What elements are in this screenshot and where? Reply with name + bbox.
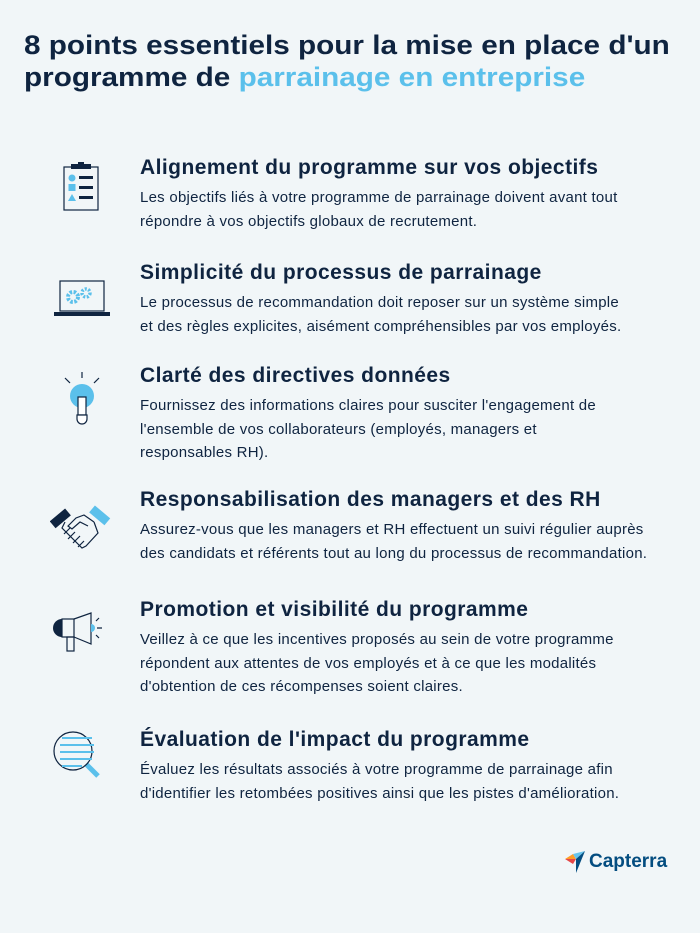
item 3: Fournissez des informations claires pour susciter l'engagement de: [140, 397, 596, 414]
item 3: l'ensemble de vos collaborateurs (employés, managers et: [140, 420, 537, 438]
icon: light bulb: [64, 372, 100, 425]
item 2: et des règles explicites, aisément compréhensibles par vos employés.: [140, 318, 621, 334]
title: programme de parrainage en entreprise: [24, 62, 585, 92]
item 3: responsables RH).: [140, 444, 268, 461]
item 1: [140, 156, 618, 230]
icon: megaphone: [53, 612, 102, 652]
item 3: Clarté des directives données: [140, 364, 451, 387]
item 5: Veillez à ce que les incentives proposés au sein de votre programme: [140, 631, 614, 648]
item 6: d'identifier les retombées positives ainsi que les pistes d'amélioration.: [140, 784, 619, 802]
icon: laptop gears: [54, 280, 110, 316]
item 5: [140, 598, 614, 695]
item 5: répondent aux attentes de vos employés et à ce que les modalités: [140, 654, 596, 672]
item 4: Responsabilisation des managers et des RH: [140, 488, 601, 511]
item 2: Le processus de recommandation doit reposer sur un système simple: [140, 294, 619, 311]
item 1: Les objectifs liés à votre programme de parrainage doivent avant tout: [140, 189, 618, 206]
item 5: Promotion et visibilité du programme: [140, 598, 528, 621]
item 6: Évaluez les résultats associés à votre programme de parrainage afin: [140, 761, 613, 778]
icon: magnifier: [53, 731, 100, 778]
item 2: Simplicité du processus de parrainage: [140, 261, 542, 284]
item 4: [140, 488, 647, 562]
item 2: [140, 261, 621, 334]
item 1: répondre à vos objectifs globaux de recrutement.: [140, 212, 477, 230]
item 5: d'obtention de ces récompenses soient claires.: [140, 678, 463, 695]
item 6: Évaluation de l'impact du programme: [140, 728, 529, 751]
item 6: [140, 727, 619, 802]
item 4: des candidats et référents tout au long du processus de recommandation.: [140, 544, 647, 562]
item 1: Alignement du programme sur vos objectifs: [140, 156, 598, 179]
icon: handshake: [50, 506, 110, 549]
logo: Capterra: Capterra: [589, 851, 667, 872]
item 3: [140, 364, 596, 461]
title: 8 points essentiels pour la mise en place d'un: [24, 30, 670, 60]
item 4: Assurez-vous que les managers et RH effectuent un suivi régulier auprès: [140, 521, 644, 538]
icon: clipboard: [63, 162, 99, 211]
title: [24, 30, 670, 92]
